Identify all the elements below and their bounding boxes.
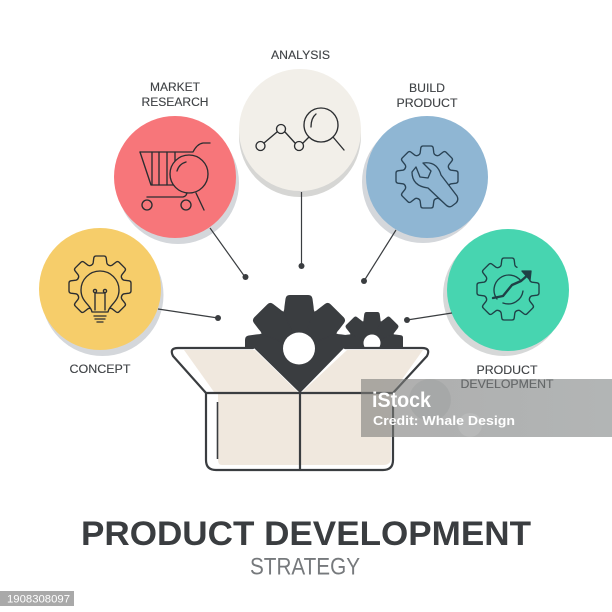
panel: analysis circle (239, 69, 361, 197)
image id tag (0, 591, 74, 606)
icon: gear with wrench (396, 146, 458, 208)
watermark: iStock credit (361, 379, 612, 437)
label: market research: MARKET (150, 82, 200, 94)
icon: gear with light bulb (69, 256, 131, 322)
icon: line chart with magnifier (256, 108, 344, 150)
image id tag: 1908308097 (7, 594, 70, 606)
connector: concept (158, 309, 221, 321)
watermark: iStock credit: Credit: Whale Design (373, 413, 515, 428)
connector: analysis (298, 192, 304, 269)
label: analysis: ANALYSIS (271, 50, 330, 62)
label: market research: RESEARCH (142, 97, 208, 109)
label: build product: BUILD (409, 83, 445, 95)
subtitle: STRATEGY (250, 554, 360, 580)
icon: shopping cart with magnifier (140, 143, 210, 210)
icon: gear with rising arrow (477, 258, 539, 320)
gears (246, 296, 403, 402)
label: build product: PRODUCT (396, 98, 458, 110)
connector: product development (404, 313, 452, 323)
panel: concept circle (39, 228, 164, 356)
panel: product development circle (443, 229, 569, 356)
label: product development: PRODUCT (476, 365, 538, 377)
panel: build product circle (362, 116, 488, 243)
box outline (172, 348, 428, 393)
label: concept: CONCEPT (70, 364, 130, 376)
title: PRODUCT DEVELOPMENT (81, 515, 531, 553)
panel: market research circle (114, 116, 239, 244)
icon: open box with gears (172, 296, 428, 470)
watermark: iStock credit: iStock (372, 389, 431, 412)
connector: market research (210, 228, 248, 280)
label: product development: DEVELOPMENT (460, 379, 554, 391)
box fill (184, 350, 298, 392)
connector: build product (361, 230, 396, 284)
